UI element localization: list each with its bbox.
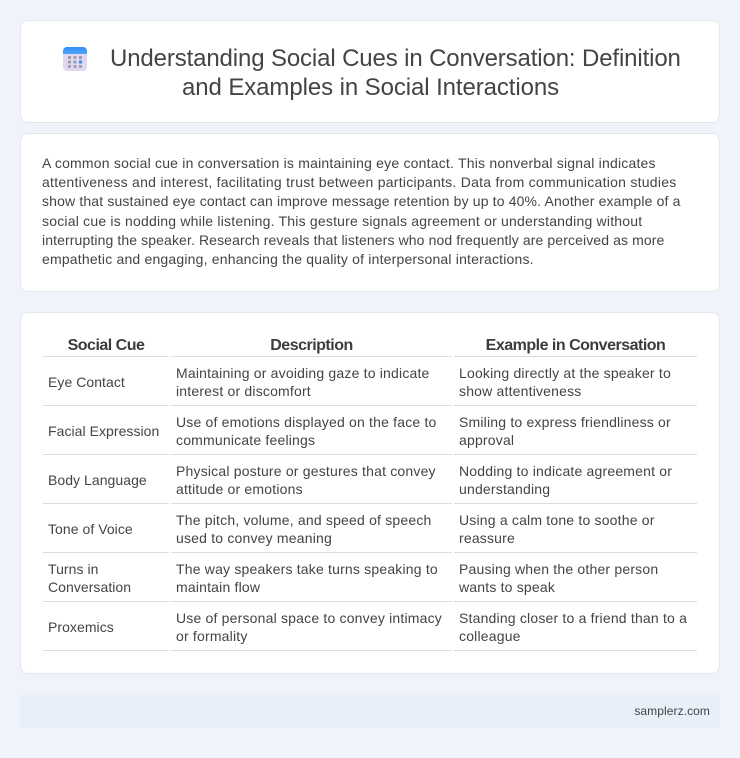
row: Eye Contact: Looking directly at the speaker to xyxy=(459,365,671,381)
row: Tone of Voice: Using a calm tone to soothe or xyxy=(459,512,655,528)
row: Turns in Conversation: Turns in xyxy=(48,561,98,577)
row: Body Language: understanding xyxy=(459,481,550,497)
panel: intro paragraph: show that sustained eye contact can improve message retention by up to 40%. Another example of a xyxy=(42,193,681,209)
row: Body Language xyxy=(43,463,697,504)
title: and Examples in Social Interactions xyxy=(182,74,559,101)
row: Facial Expression: Use of emotions displayed on the face to xyxy=(176,414,437,430)
row: Body Language: Body Language xyxy=(48,472,147,488)
row: Facial Expression: approval xyxy=(459,432,514,448)
title: Understanding Social Cues in Conversation: Definition xyxy=(110,45,681,72)
row: Turns in Conversation: Pausing when the other person xyxy=(459,561,658,577)
panel: intro paragraph: A common social cue in conversation is maintaining eye contact. This nonverbal signal indicates xyxy=(42,155,656,171)
table header xyxy=(43,337,697,357)
row: Eye Contact xyxy=(43,365,697,406)
icon: calendar xyxy=(63,47,87,71)
row: Eye Contact: Maintaining or avoiding gaze to indicate xyxy=(176,365,430,381)
row: Facial Expression xyxy=(43,414,697,455)
table header: Social Cue xyxy=(68,337,144,354)
row: Facial Expression: communicate feelings xyxy=(176,432,315,448)
row: Eye Contact: Eye Contact xyxy=(48,374,125,390)
row: Tone of Voice: used to convey meaning xyxy=(176,530,332,546)
row: Turns in Conversation: The way speakers take turns speaking to xyxy=(176,561,438,577)
row: Body Language: attitude or emotions xyxy=(176,481,303,497)
row: Tone of Voice: The pitch, volume, and speed of speech xyxy=(176,512,432,528)
row: Turns in Conversation: wants to speak xyxy=(459,579,555,595)
row: Body Language: Nodding to indicate agreement or xyxy=(459,463,672,479)
row: Eye Contact: show attentiveness xyxy=(459,383,582,399)
row: Proxemics xyxy=(43,610,697,651)
row: Eye Contact: interest or discomfort xyxy=(176,383,311,399)
row: Turns in Conversation: Conversation xyxy=(48,579,131,595)
panel: intro paragraph: empathetic and engaging, enhancing the quality of interpersonal interactions. xyxy=(42,251,534,267)
panel: intro paragraph: social cue is nodding while listening. This gesture signals agreement or understanding without xyxy=(42,213,642,229)
panel: intro paragraph: interrupting the speaker. Research reveals that listeners who nod frequently are perceived as more xyxy=(42,232,664,248)
panel: intro paragraph xyxy=(20,133,720,292)
footer source text: samplerz.com xyxy=(634,704,710,718)
row: Body Language: Physical posture or gestures that convey xyxy=(176,463,436,479)
row: Proxemics: Standing closer to a friend than to a xyxy=(459,610,687,626)
table header: Example in Conversation xyxy=(486,337,665,354)
row: Facial Expression: Facial Expression xyxy=(48,423,159,439)
table header: Description xyxy=(270,337,353,354)
row: Proxemics: or formality xyxy=(176,628,248,644)
panel: intro paragraph: attentiveness and interest, facilitating trust between participants. Data from communication studies xyxy=(42,174,677,190)
row: Facial Expression: Smiling to express friendliness or xyxy=(459,414,671,430)
title xyxy=(110,45,681,101)
row: Tone of Voice: Tone of Voice xyxy=(48,521,133,537)
panel: social cues table xyxy=(20,312,720,674)
row: Turns in Conversation: maintain flow xyxy=(176,579,260,595)
row: Tone of Voice xyxy=(43,512,697,553)
panel: title card xyxy=(20,20,720,123)
row: Proxemics: Proxemics xyxy=(48,619,114,635)
footer bar xyxy=(20,695,720,728)
row: Tone of Voice: reassure xyxy=(459,530,515,546)
row: Proxemics: colleague xyxy=(459,628,521,644)
row: Turns in Conversation xyxy=(43,561,697,602)
row: Proxemics: Use of personal space to convey intimacy xyxy=(176,610,442,626)
